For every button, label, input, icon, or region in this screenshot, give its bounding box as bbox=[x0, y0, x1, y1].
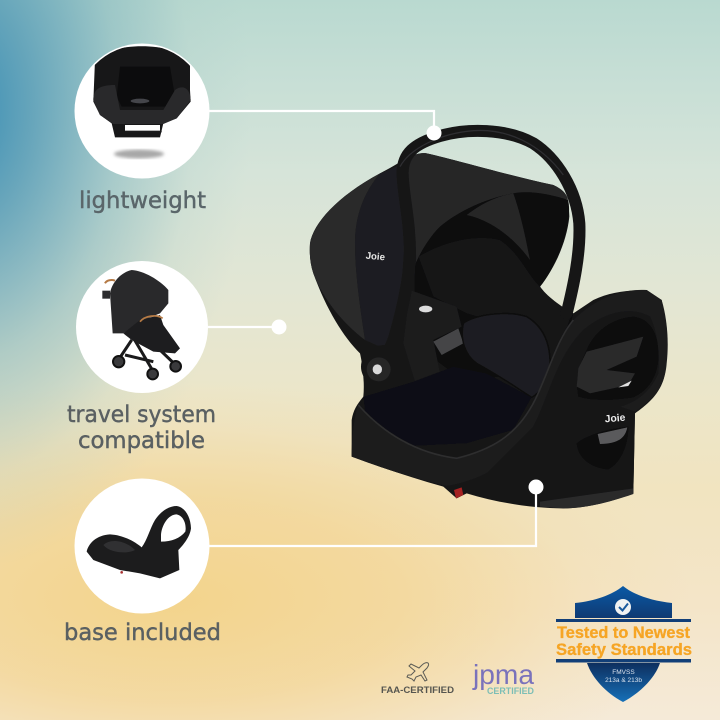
base level window bbox=[577, 427, 628, 469]
icon: stroller bbox=[102, 270, 181, 379]
canopy opening bbox=[413, 192, 573, 383]
label: lightweight: lightweight bbox=[79, 188, 206, 214]
carry handle bbox=[388, 131, 579, 358]
label: travel system compatible bbox=[67, 402, 216, 454]
circle bbox=[76, 261, 208, 393]
shield top bbox=[575, 586, 672, 618]
FAA text: FAA-CERTIFIED bbox=[381, 685, 454, 696]
base Joie logo: Joie bbox=[604, 413, 626, 425]
base front panel bbox=[473, 402, 635, 508]
infographic canvas bbox=[66, 44, 692, 702]
canopy inner mesh bbox=[467, 193, 530, 260]
connector dot on handle bbox=[426, 126, 442, 140]
icon: check bbox=[615, 599, 631, 615]
JPMA certified mark: jpma bbox=[472, 659, 534, 690]
label: travel system compatible: travel system bbox=[67, 402, 216, 428]
canopy brim bbox=[400, 153, 568, 265]
buckle bbox=[433, 328, 463, 355]
shadow bbox=[114, 150, 164, 158]
circle bbox=[74, 478, 210, 614]
base rim and loop bbox=[352, 290, 668, 486]
canopy side panel bbox=[355, 165, 407, 348]
Joie canopy logo: Joie bbox=[365, 251, 386, 263]
badge headline: Tested to Newest bbox=[557, 624, 690, 642]
shield bars bbox=[556, 619, 691, 622]
inner seat cushion bbox=[418, 238, 572, 363]
harness panel bbox=[403, 290, 462, 382]
head cushion pad bbox=[462, 314, 550, 397]
icon: car seat base bbox=[87, 506, 191, 578]
panel: lightweight bbox=[74, 44, 210, 178]
pivot leaf logo bbox=[373, 364, 382, 374]
panel: travel system compatible bbox=[76, 261, 208, 393]
product: infant car seat on base bbox=[310, 130, 668, 508]
label: base included: base included bbox=[64, 620, 221, 646]
seat shell bbox=[363, 367, 532, 447]
loop window bbox=[577, 317, 658, 400]
JPMA certified mark: CERTIFIED bbox=[487, 686, 534, 696]
connector: lightweight to handle bbox=[209, 111, 434, 133]
red belt detail bbox=[454, 487, 463, 498]
label: travel system compatible: compatible bbox=[78, 428, 205, 454]
leaf logo bbox=[419, 306, 432, 312]
icon: seat front view bbox=[93, 46, 191, 137]
panel: base included bbox=[74, 478, 210, 614]
circle bbox=[74, 44, 210, 178]
standards text: FMVSS bbox=[612, 669, 635, 676]
handle pivot bbox=[361, 345, 409, 388]
icon: airplane bbox=[407, 663, 429, 681]
connector: base included to product bbox=[209, 480, 544, 546]
seat seen through loop bbox=[577, 337, 643, 393]
safety shield badge: 213a & 213b bbox=[605, 677, 642, 684]
canopy left panel bbox=[310, 173, 380, 340]
shield bottom bbox=[587, 663, 660, 702]
safety shield badge bbox=[556, 586, 692, 702]
connector: travel system dot bbox=[208, 320, 286, 334]
seat silhouette bbox=[310, 153, 667, 508]
safety shield badge: Safety Standards bbox=[556, 641, 692, 659]
FAA certified mark bbox=[381, 663, 454, 696]
